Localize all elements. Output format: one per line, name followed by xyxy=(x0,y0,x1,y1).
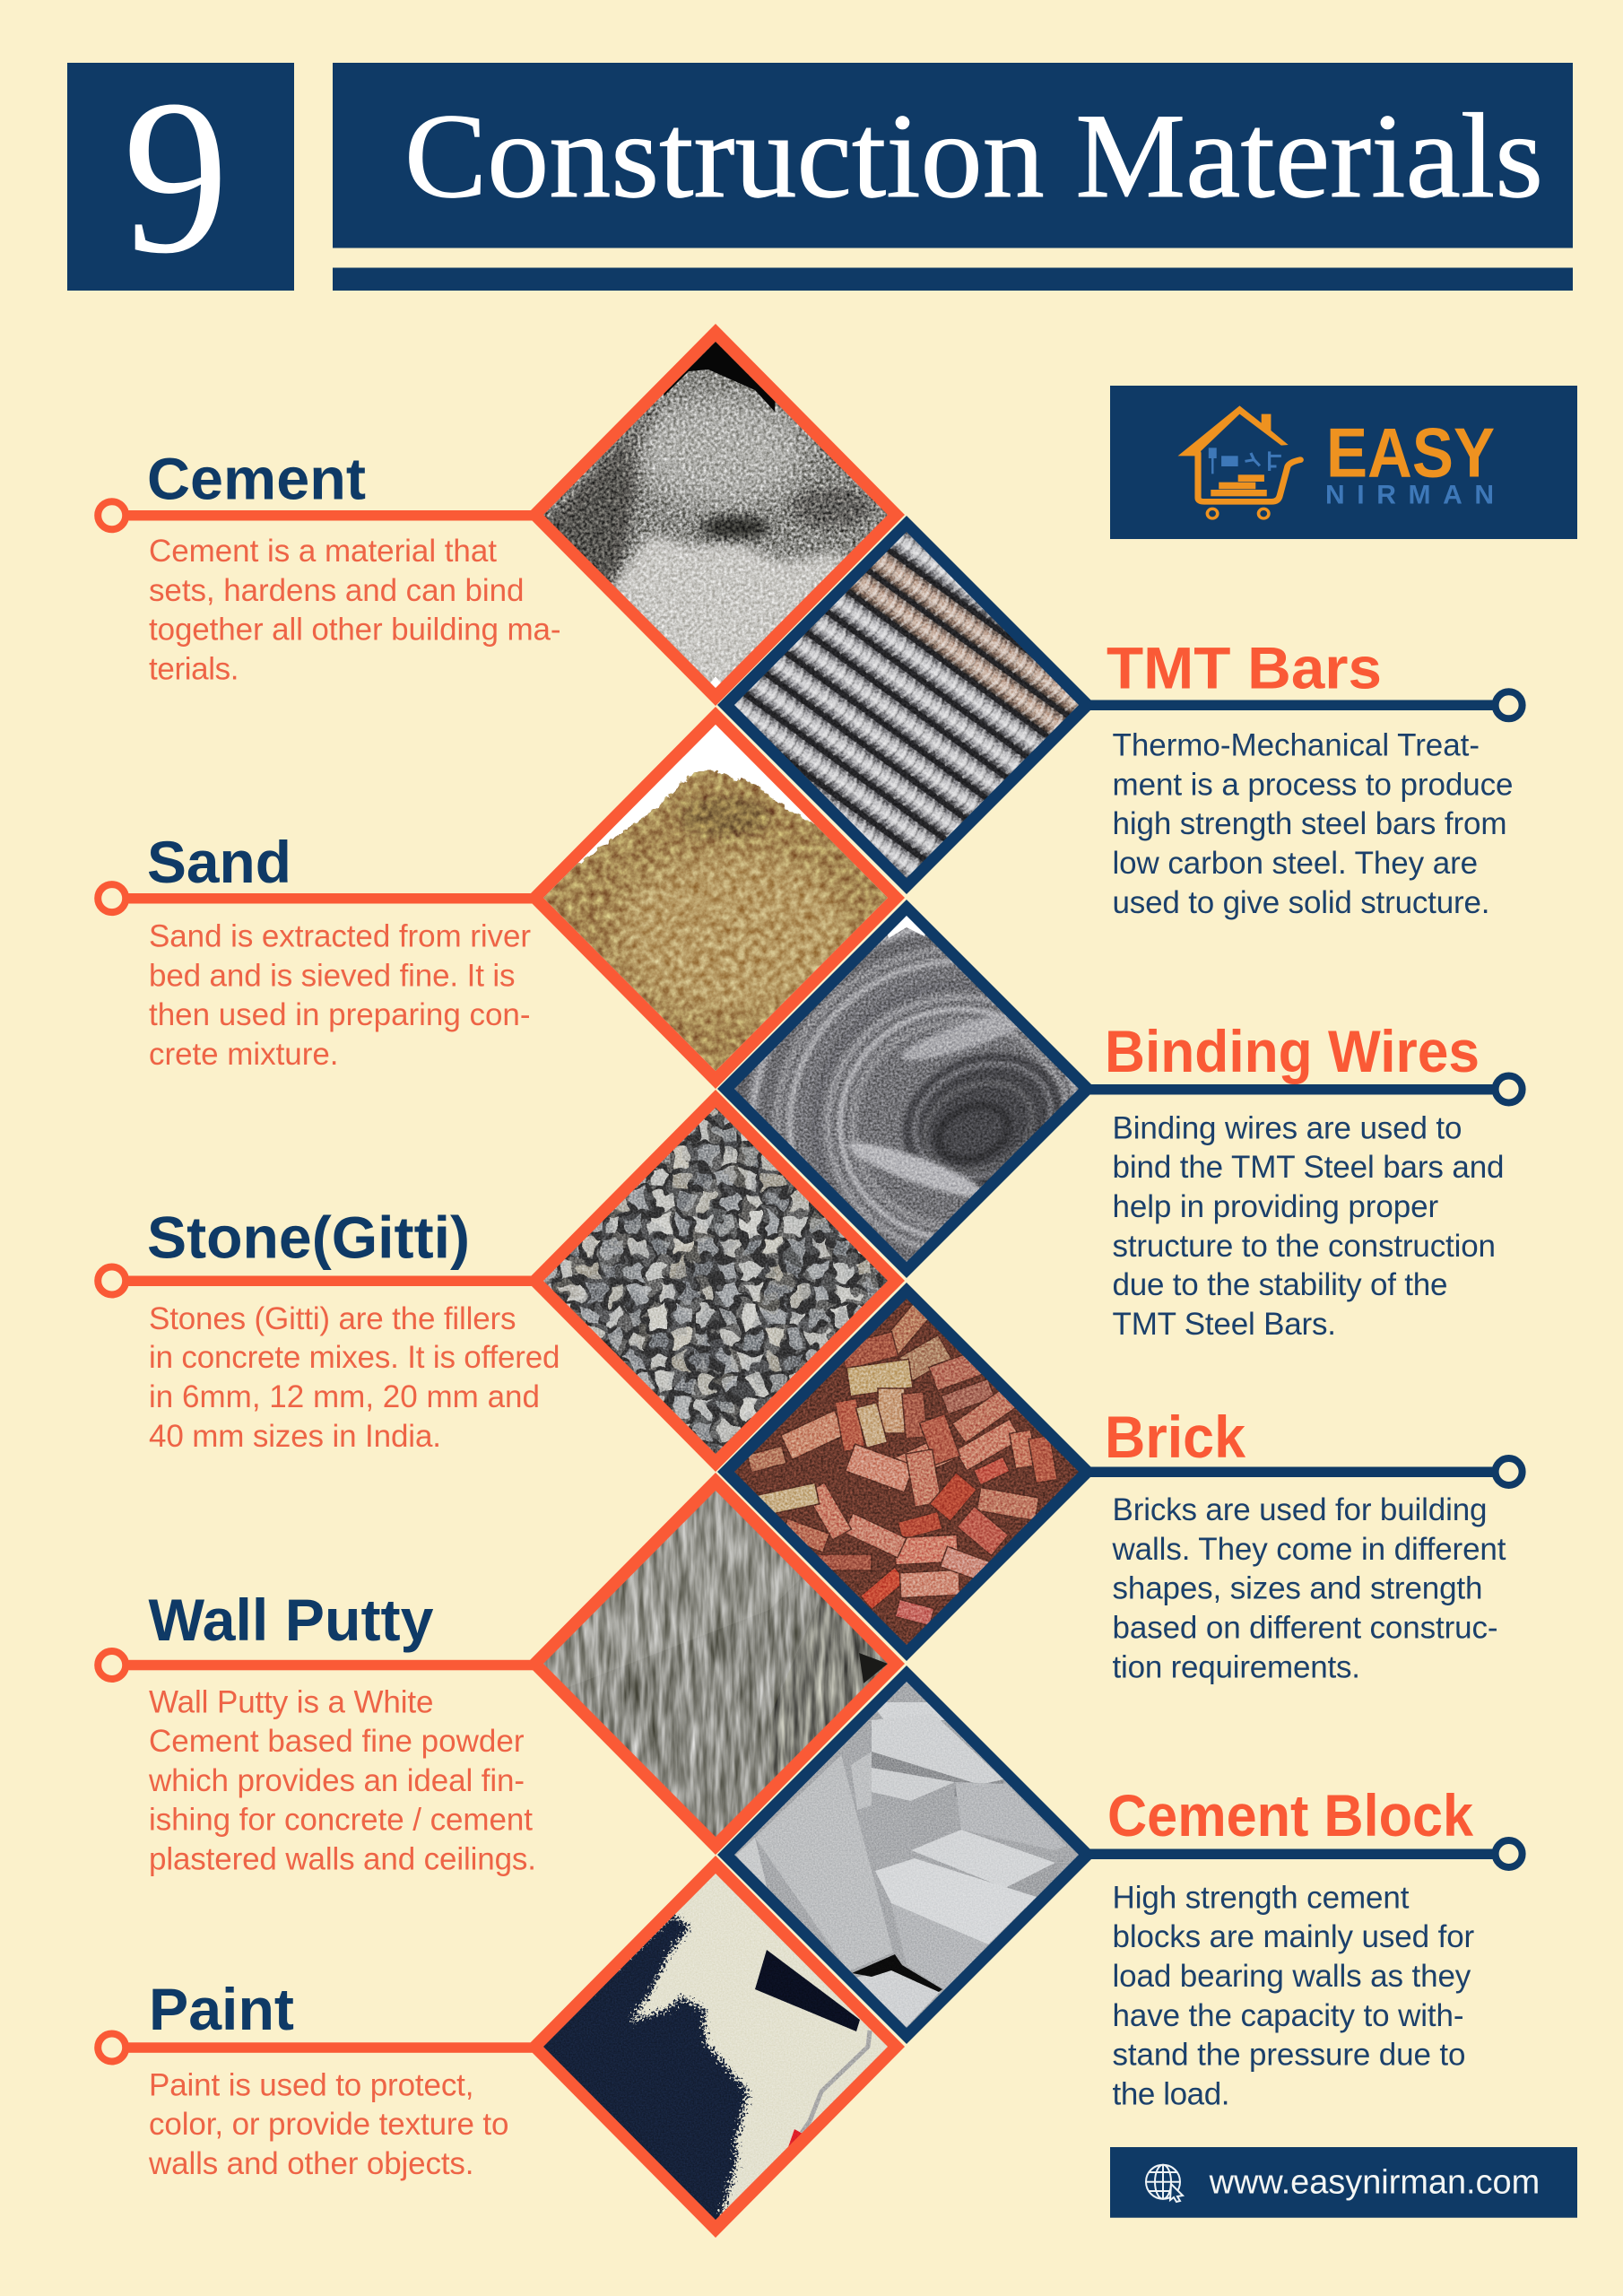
description: the load. xyxy=(1112,2077,1230,2112)
description: Wall Putty is a White xyxy=(149,1685,434,1720)
panel: stone xyxy=(98,974,1022,1587)
description: based on different construc- xyxy=(1112,1611,1497,1646)
connector line and ring xyxy=(98,2034,534,2061)
description: ment is a process to produce xyxy=(1112,768,1514,803)
image: sand pile diamond xyxy=(526,707,905,1089)
description xyxy=(148,1685,536,1876)
image: steel rebars diamond xyxy=(717,516,1090,894)
description: plastered walls and ceilings. xyxy=(149,1842,536,1876)
description: used to give solid structure. xyxy=(1112,885,1490,920)
description: TMT Steel Bars. xyxy=(1112,1307,1336,1342)
connector line and ring xyxy=(1085,1458,1523,1485)
description xyxy=(149,1301,560,1454)
heading: Paint xyxy=(149,1976,294,2042)
description xyxy=(149,534,561,687)
website address: www.easynirman.com xyxy=(1209,2164,1540,2202)
heading: Cement xyxy=(147,445,366,511)
description: walls. They come in different xyxy=(1112,1532,1506,1567)
heading: Binding Wires xyxy=(1105,1018,1480,1084)
description: 40 mm sizes in India. xyxy=(149,1419,441,1454)
connector line and ring xyxy=(1085,691,1523,718)
heading: TMT Bars xyxy=(1107,635,1382,701)
image: gravel diamond xyxy=(409,974,1022,1587)
description: crete mixture. xyxy=(149,1037,339,1072)
icon: globe with cursor xyxy=(1146,2165,1183,2202)
number badge xyxy=(67,55,294,300)
description: Binding wires are used to xyxy=(1112,1110,1462,1146)
connector line and ring xyxy=(98,501,534,529)
description: ishing for concrete / cement xyxy=(149,1803,533,1837)
panel: TMT bars xyxy=(556,374,1523,1036)
description: structure to the construction xyxy=(1112,1229,1496,1264)
heading: Sand xyxy=(147,829,291,895)
title banner: Construction Materials xyxy=(404,90,1543,223)
panel: wall putty xyxy=(98,1473,905,1876)
connector line and ring xyxy=(1085,1076,1523,1103)
description: tion requirements. xyxy=(1112,1650,1360,1685)
description xyxy=(148,2068,509,2181)
heading: Brick xyxy=(1105,1404,1245,1470)
description: help in providing proper xyxy=(1112,1189,1438,1224)
panel: paint xyxy=(98,1856,905,2238)
description: have the capacity to with- xyxy=(1112,1998,1463,2033)
description: high strength steel bars from xyxy=(1112,806,1506,841)
panel: cement xyxy=(98,324,905,706)
description: bed and is sieved fine. It is xyxy=(149,958,515,993)
description: sets, hardens and can bind xyxy=(149,573,524,608)
description: together all other building ma- xyxy=(149,612,561,648)
description xyxy=(1112,1492,1506,1685)
title underline bar xyxy=(333,267,1573,291)
title banner xyxy=(333,63,1573,248)
image: cement blocks diamond xyxy=(717,1665,1096,2044)
image: brick pile diamond xyxy=(717,1283,1096,1661)
description: in 6mm, 12 mm, 20 mm and xyxy=(149,1379,540,1414)
description: low carbon steel. They are xyxy=(1112,846,1478,881)
image: cement pile diamond xyxy=(526,324,905,706)
description: bind the TMT Steel bars and xyxy=(1112,1150,1505,1185)
logo wordmark: NIRMAN xyxy=(1325,481,1494,509)
description: Thermo-Mechanical Treat- xyxy=(1112,728,1480,763)
description xyxy=(149,918,531,1072)
description: Bricks are used for building xyxy=(1112,1492,1487,1527)
image: wire coil diamond xyxy=(717,900,1091,1278)
description: Cement is a material that xyxy=(149,534,497,569)
website bar xyxy=(1110,2147,1577,2218)
description: Cement based fine powder xyxy=(149,1724,525,1759)
connector line and ring xyxy=(98,1266,534,1295)
description: stand the pressure due to xyxy=(1112,2038,1465,2073)
connector line and ring xyxy=(98,884,534,912)
description: Paint is used to protect, xyxy=(149,2068,473,2103)
panel: sand xyxy=(98,707,905,1089)
connector line and ring xyxy=(98,1651,534,1679)
icon: house cart logo xyxy=(1178,405,1300,518)
description: walls and other objects. xyxy=(148,2146,473,2181)
connector line and ring xyxy=(1085,1840,1523,1867)
description: load bearing walls as they xyxy=(1112,1959,1471,1994)
description: blocks are mainly used for xyxy=(1112,1919,1475,1954)
description: in concrete mixes. It is offered xyxy=(149,1340,560,1375)
description: shapes, sizes and strength xyxy=(1112,1571,1483,1606)
description: due to the stability of the xyxy=(1112,1267,1447,1302)
description xyxy=(1112,1110,1505,1342)
number badge: 9 xyxy=(123,55,229,300)
panel: binding wires xyxy=(691,866,1523,1383)
description: which provides an ideal fin- xyxy=(148,1763,525,1798)
image: paint roller diamond xyxy=(526,1856,905,2238)
heading: Wall Putty xyxy=(149,1587,434,1653)
heading: Cement Block xyxy=(1107,1782,1473,1848)
header xyxy=(67,55,1573,300)
description xyxy=(1112,728,1514,920)
heading: Stone(Gitti) xyxy=(147,1205,470,1271)
description: Sand is extracted from river xyxy=(149,918,531,954)
logo panel xyxy=(1110,386,1577,539)
description: High strength cement xyxy=(1112,1880,1410,1915)
description: terials. xyxy=(149,651,239,687)
panel: cement block xyxy=(717,1665,1523,2112)
panel: brick xyxy=(717,1283,1523,1685)
description: then used in preparing con- xyxy=(149,997,531,1032)
image: textured wall diamond xyxy=(526,1473,905,1855)
logo wordmark: EASY xyxy=(1326,413,1495,491)
description: color, or provide texture to xyxy=(149,2107,509,2142)
description xyxy=(1112,1880,1475,2112)
description: Stones (Gitti) are the fillers xyxy=(149,1301,516,1336)
